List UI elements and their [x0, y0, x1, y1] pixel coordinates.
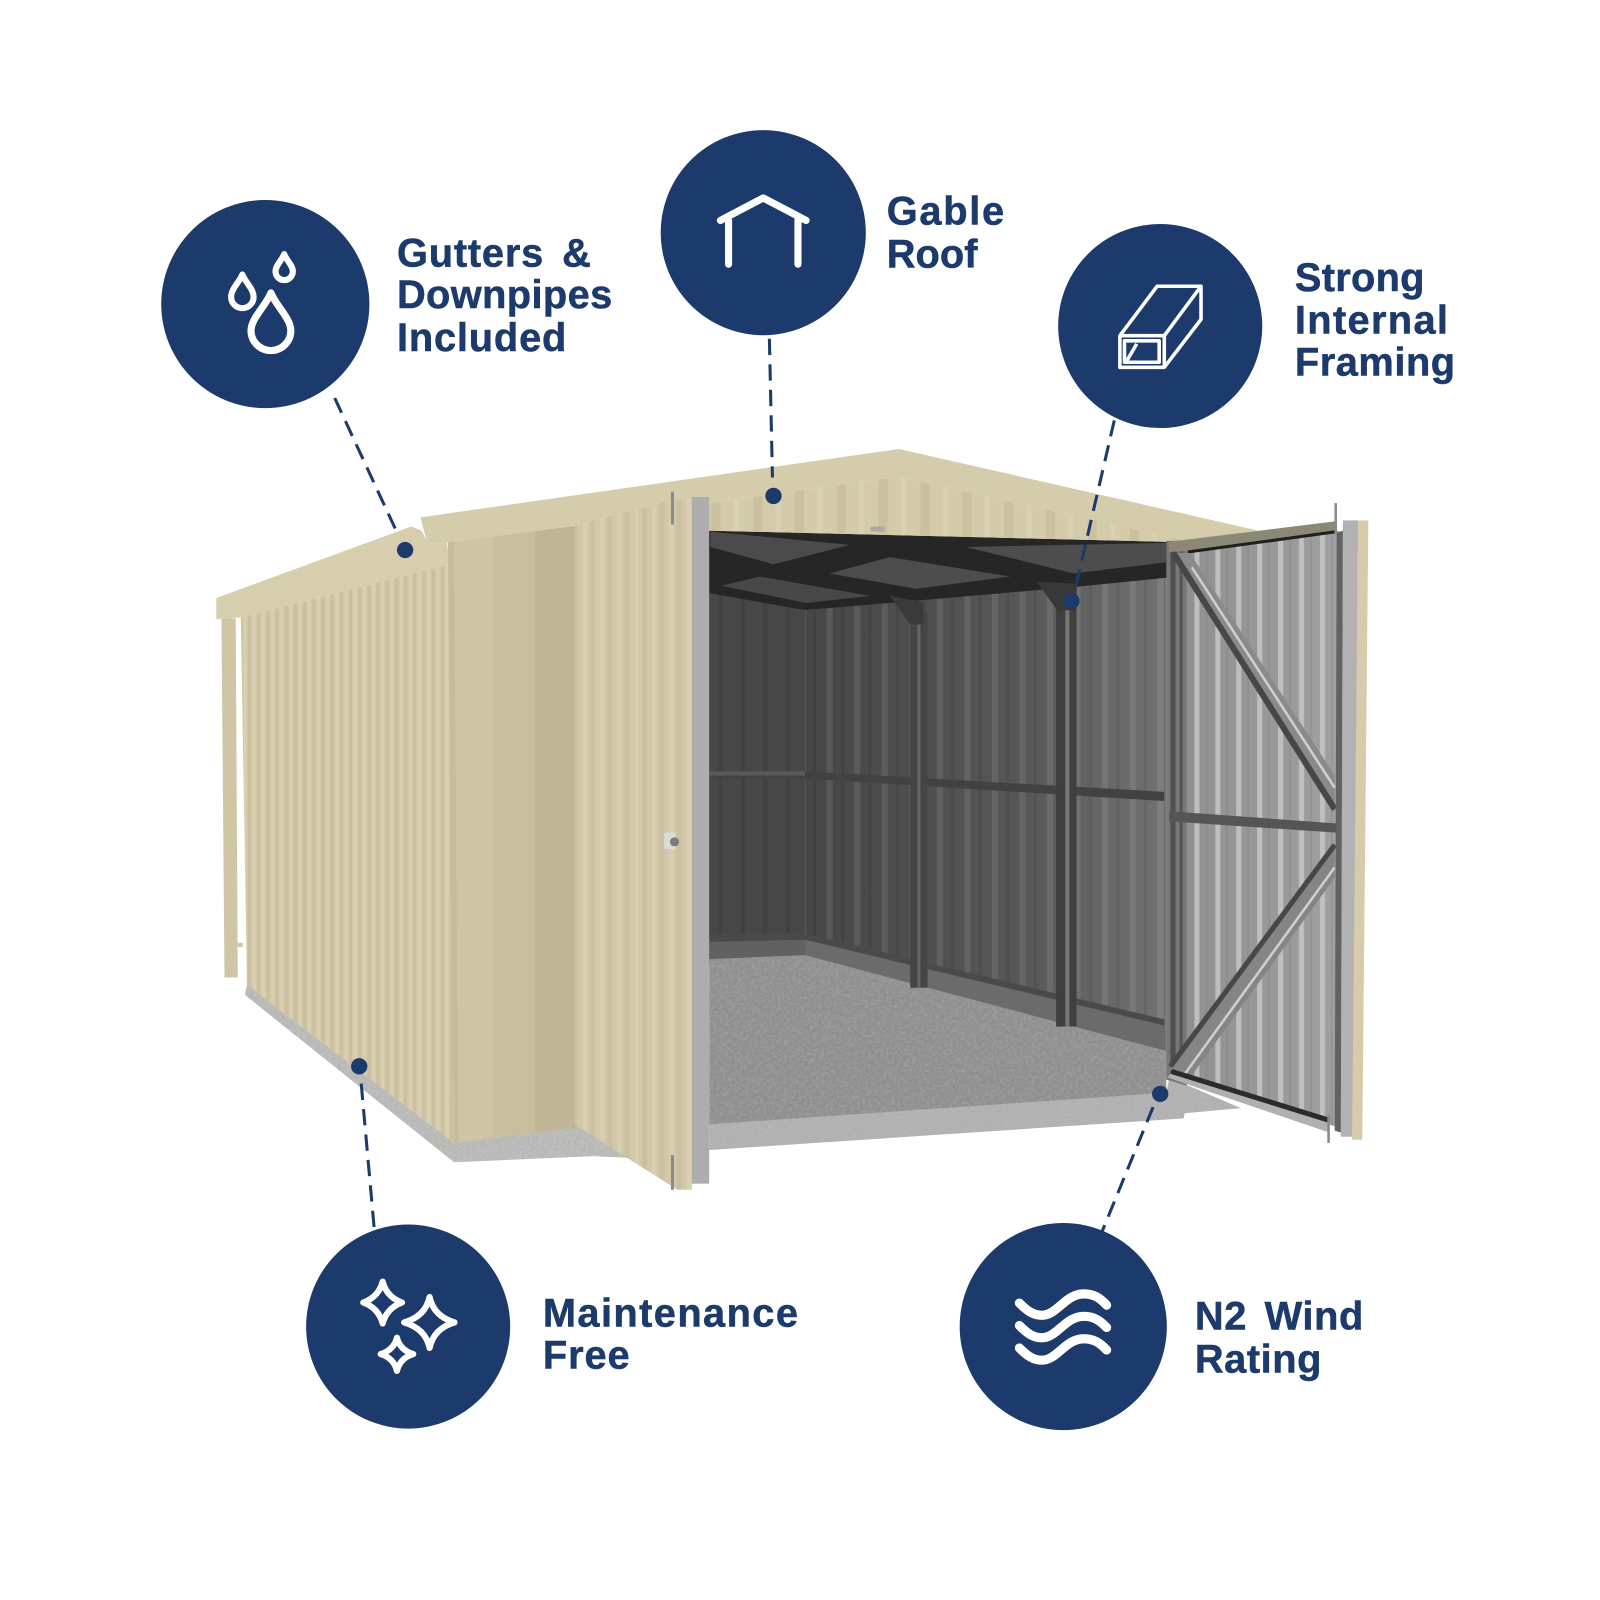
label: internal framing — [1295, 256, 1455, 385]
right door interior — [1166, 521, 1339, 1133]
label: gutters and downpipes — [397, 231, 612, 360]
leader line: gutters — [335, 398, 413, 558]
label: gable roof — [887, 189, 1004, 276]
interior posts — [910, 602, 1077, 1027]
ridge and barge capping — [420, 449, 1258, 544]
front left wall panel — [448, 526, 577, 1143]
bolt — [870, 527, 885, 532]
label: gutters and downpipes: Gutters & — [397, 231, 591, 275]
icon: house outline — [720, 198, 806, 264]
ceiling and roof framing — [708, 531, 1168, 624]
interior side wall — [709, 577, 1166, 1061]
label: internal framing: Internal — [1295, 299, 1448, 343]
door bottom beam — [1167, 1072, 1330, 1133]
concrete slab under side wall — [245, 985, 638, 1162]
gable end above opening — [708, 477, 1187, 542]
icon: sparkles — [363, 1282, 455, 1371]
leader line: wind rating — [1102, 1086, 1168, 1232]
label: gable roof: Gable — [887, 189, 1004, 233]
middle door rail — [1169, 811, 1337, 833]
label: gutters and downpipes: Included — [397, 316, 566, 360]
shed illustration — [216, 449, 1368, 1190]
leader line: internal framing — [1063, 420, 1114, 609]
latch — [664, 833, 679, 849]
label: maintenance free: Free — [543, 1333, 630, 1377]
label: wind rating: Rating — [1195, 1337, 1321, 1381]
label: internal framing: Framing — [1295, 341, 1455, 385]
side roof — [216, 527, 450, 619]
right door frame — [1329, 503, 1368, 1143]
badge: wind rating — [960, 1223, 1167, 1430]
hinges — [671, 492, 674, 1190]
icon: wind waves — [1019, 1294, 1107, 1360]
badge: gutters and downpipes — [161, 200, 369, 408]
label: internal framing: Strong — [1295, 256, 1424, 300]
label: gutters and downpipes: Downpipes — [397, 273, 612, 317]
left door — [574, 498, 692, 1190]
lower door brace — [1169, 843, 1335, 1080]
floor slab edge — [709, 1078, 1241, 1150]
icon: box section tube — [1120, 286, 1201, 367]
badge: internal framing — [1058, 224, 1262, 428]
label: wind rating — [1195, 1295, 1363, 1381]
upper door brace — [1173, 553, 1335, 811]
left door frame — [692, 497, 709, 1184]
downpipe — [221, 618, 243, 978]
badge: gable roof — [661, 130, 866, 335]
badge: maintenance free — [306, 1224, 510, 1429]
concrete floor — [709, 955, 1166, 1124]
side wall — [241, 564, 454, 1143]
leader line: maintenance free — [351, 1058, 374, 1232]
label: maintenance free — [543, 1292, 798, 1377]
label: gable roof: Roof — [887, 232, 978, 276]
leader line: gable roof — [765, 339, 782, 504]
door top edge — [1168, 521, 1335, 552]
interior back wall — [708, 590, 805, 964]
label: maintenance free: Maintenance — [543, 1292, 798, 1336]
icon: water drops — [231, 254, 293, 351]
wall rails — [709, 771, 1164, 1026]
label: wind rating: N2 Wind — [1195, 1295, 1363, 1339]
